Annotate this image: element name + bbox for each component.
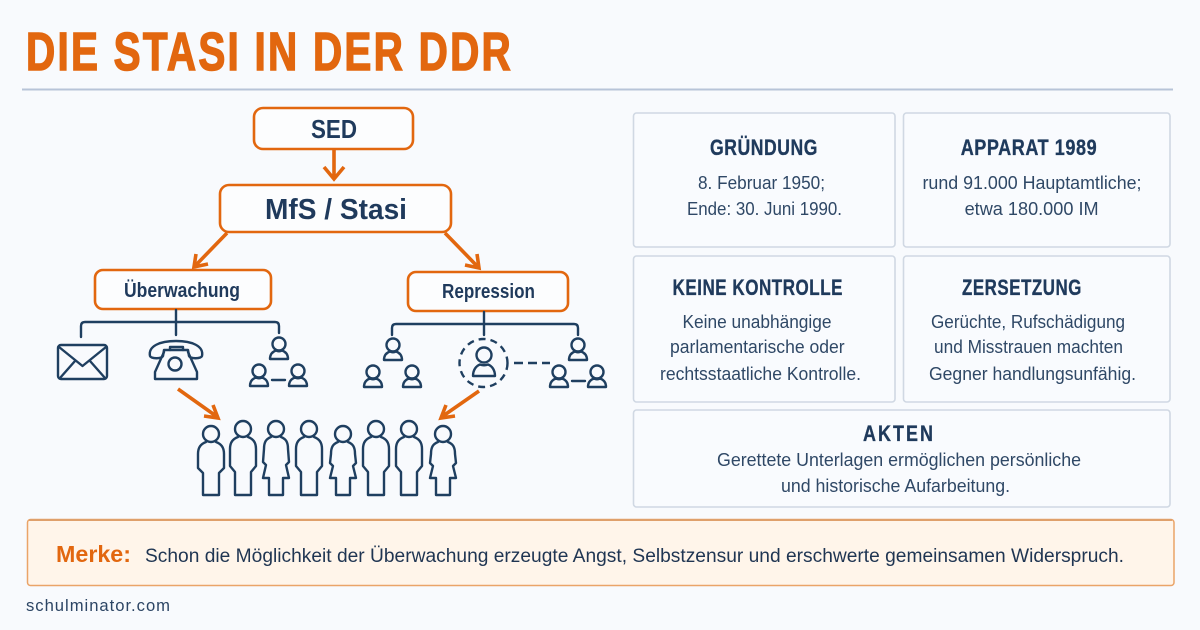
panel: Keine Kontrolle [634, 256, 895, 402]
panel: Keine Kontrolle: parlamentarische oder [670, 337, 845, 357]
connector: Repression branches [392, 312, 578, 335]
icon: telephone [150, 341, 202, 379]
box: Überwachung: Überwachung [124, 279, 240, 302]
box: SED: SED [311, 114, 357, 144]
arrow: MfS to Überwachung [194, 233, 227, 267]
icon: group of three [364, 338, 421, 387]
icon: informant network right [550, 338, 606, 387]
panel: Keine Kontrolle: KEINE KONTROLLE [672, 275, 843, 300]
panel: Gründung: 8. Februar 1950; [698, 173, 825, 193]
panel: Gründung: Ende: 30. Juni 1990. [687, 199, 842, 219]
arrow: SED to MfS [324, 149, 344, 179]
icon: informant network left [250, 338, 307, 386]
panel: Keine Kontrolle: rechtsstaatliche Kontrolle. [660, 364, 861, 384]
box: MfS / Stasi [220, 185, 451, 232]
box: SED [254, 108, 413, 149]
callout: Merke: Merke: [56, 541, 131, 567]
panel: Akten: AKTEN [863, 421, 935, 446]
arrow: MfS to Repression [445, 233, 479, 268]
panel: Akten: und historische Aufarbeitung. [781, 476, 1010, 496]
box: Überwachung [95, 270, 271, 309]
panel: Apparat 1989: etwa 180.000 IM [965, 199, 1099, 219]
panel: Zersetzung: Gerüchte, Rufschädigung [931, 312, 1125, 332]
panel: Gründung: GRÜNDUNG [710, 135, 818, 160]
panel: Apparat 1989 [904, 113, 1170, 247]
panel: Apparat 1989: APPARAT 1989 [961, 135, 1097, 160]
panel: Zersetzung [904, 256, 1170, 402]
panel: Apparat 1989: rund 91.000 Hauptamtliche; [922, 173, 1142, 193]
arrow: phone to population [178, 389, 218, 418]
panel: Akten: Gerettete Unterlagen ermöglichen persönliche [717, 450, 1081, 470]
arrow: dashed circle to population [441, 391, 479, 418]
callout: Merke [28, 520, 1174, 586]
panel: Keine Kontrolle: Keine unabhängige [682, 312, 832, 332]
footer: source: schulminator.com [26, 596, 171, 615]
panel: Gründung [634, 113, 895, 247]
box: Repression: Repression [442, 281, 535, 303]
organisation diagram [58, 108, 606, 495]
panel: Zersetzung: und Misstrauen machten [934, 337, 1123, 357]
icon: envelope [58, 345, 107, 379]
panel: Zersetzung: ZERSETZUNG [962, 275, 1082, 300]
population row [198, 421, 456, 495]
callout: Merke: Schon die Möglichkeit der Überwachung erzeugte Angst, Selbstzensur und erschwerte gemeinsamen Widerspruch. [145, 546, 1124, 567]
connector: Überwachung branches [81, 310, 279, 337]
box: Repression [408, 272, 568, 311]
panel: Akten [634, 410, 1170, 507]
box: MfS / Stasi: MfS / Stasi [265, 194, 407, 226]
panel: Zersetzung: Gegner handlungsunfähig. [929, 364, 1136, 384]
title: DIE STASI IN DER DDR [26, 22, 513, 82]
icon: watched person in dashed circle [460, 339, 550, 387]
